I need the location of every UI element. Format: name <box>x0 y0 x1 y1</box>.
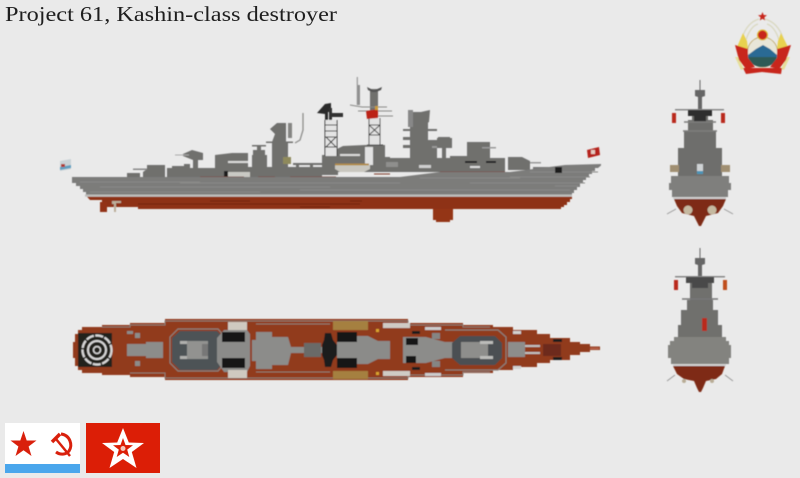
bow fittings <box>513 331 562 369</box>
wheat <box>737 33 788 49</box>
side platforms <box>670 165 730 172</box>
red star <box>113 438 133 457</box>
title: Project 61, Kashin-class destroyer <box>5 2 337 26</box>
shafts <box>667 209 733 214</box>
front hull <box>669 176 731 197</box>
hull red <box>674 199 726 226</box>
central superstructure <box>252 332 322 369</box>
hammer and sickle <box>52 434 71 456</box>
lower ribbon <box>743 68 782 74</box>
centre disc <box>120 446 126 451</box>
front view of ship <box>667 80 733 226</box>
upper superstructure <box>678 110 722 177</box>
diagonal mast <box>295 113 303 143</box>
signal flags <box>672 113 725 123</box>
dark radar detail <box>688 110 712 122</box>
helipad <box>78 333 112 367</box>
guards ensign flag <box>86 423 160 473</box>
boats and windows <box>200 154 505 178</box>
white star <box>102 428 144 468</box>
tan deck areas <box>333 321 368 379</box>
anchors <box>682 379 714 383</box>
left ribbon <box>735 45 755 69</box>
mast <box>695 248 705 277</box>
aft missile deck <box>170 329 225 371</box>
red bow <box>673 366 725 392</box>
signal flags <box>674 280 727 290</box>
lower pale wheat <box>735 57 790 70</box>
rudder and propeller <box>100 201 121 212</box>
hammer and sickle disc <box>758 30 768 40</box>
superstructure <box>127 110 557 178</box>
funnel black shapes <box>322 333 337 367</box>
top view of ship <box>73 319 600 380</box>
shafts <box>667 375 733 381</box>
aft launcher housing <box>217 322 250 378</box>
centre ensign stripe <box>697 171 703 174</box>
upper superstructure <box>678 277 722 337</box>
forward gun turret <box>508 342 540 357</box>
anchor recess <box>555 167 562 173</box>
forward superstructure <box>403 327 457 376</box>
red star <box>10 431 36 456</box>
bow jack <box>587 147 600 158</box>
ensign at stern <box>60 159 71 171</box>
hull red <box>87 197 572 209</box>
right ribbon <box>770 45 791 69</box>
cross arms <box>682 298 718 300</box>
yard <box>675 109 724 110</box>
naval ensign flag <box>5 423 80 473</box>
propellers <box>684 206 716 214</box>
bow staff <box>590 348 599 350</box>
sonar dome <box>433 209 453 222</box>
centre ensign <box>697 164 703 174</box>
wreath <box>742 19 783 40</box>
flag field <box>5 423 80 473</box>
band <box>673 364 726 366</box>
star <box>758 12 767 20</box>
radar detail <box>686 277 714 288</box>
deck border lines <box>102 321 490 378</box>
side view of ship <box>60 77 601 222</box>
bow view of ship <box>667 248 733 392</box>
hull band <box>673 197 726 199</box>
mountain <box>748 45 777 57</box>
masts <box>317 77 393 165</box>
emblem <box>735 12 791 74</box>
cross arms <box>683 122 717 131</box>
deck red outline <box>73 319 600 380</box>
aft gun turret <box>127 331 163 366</box>
flag field <box>86 423 160 473</box>
blue stripe <box>5 464 80 473</box>
medallion sky <box>748 37 778 67</box>
red jack <box>702 318 707 331</box>
hull dark streaks <box>138 201 362 207</box>
valley <box>748 57 777 67</box>
hull plating lines <box>80 172 598 192</box>
boot stripe <box>85 194 572 197</box>
mast <box>695 80 705 109</box>
midships launcher housing <box>337 323 410 376</box>
yard <box>675 276 725 278</box>
forward missile deck <box>445 330 506 370</box>
upper hull <box>668 337 731 364</box>
hull grey <box>72 164 601 195</box>
